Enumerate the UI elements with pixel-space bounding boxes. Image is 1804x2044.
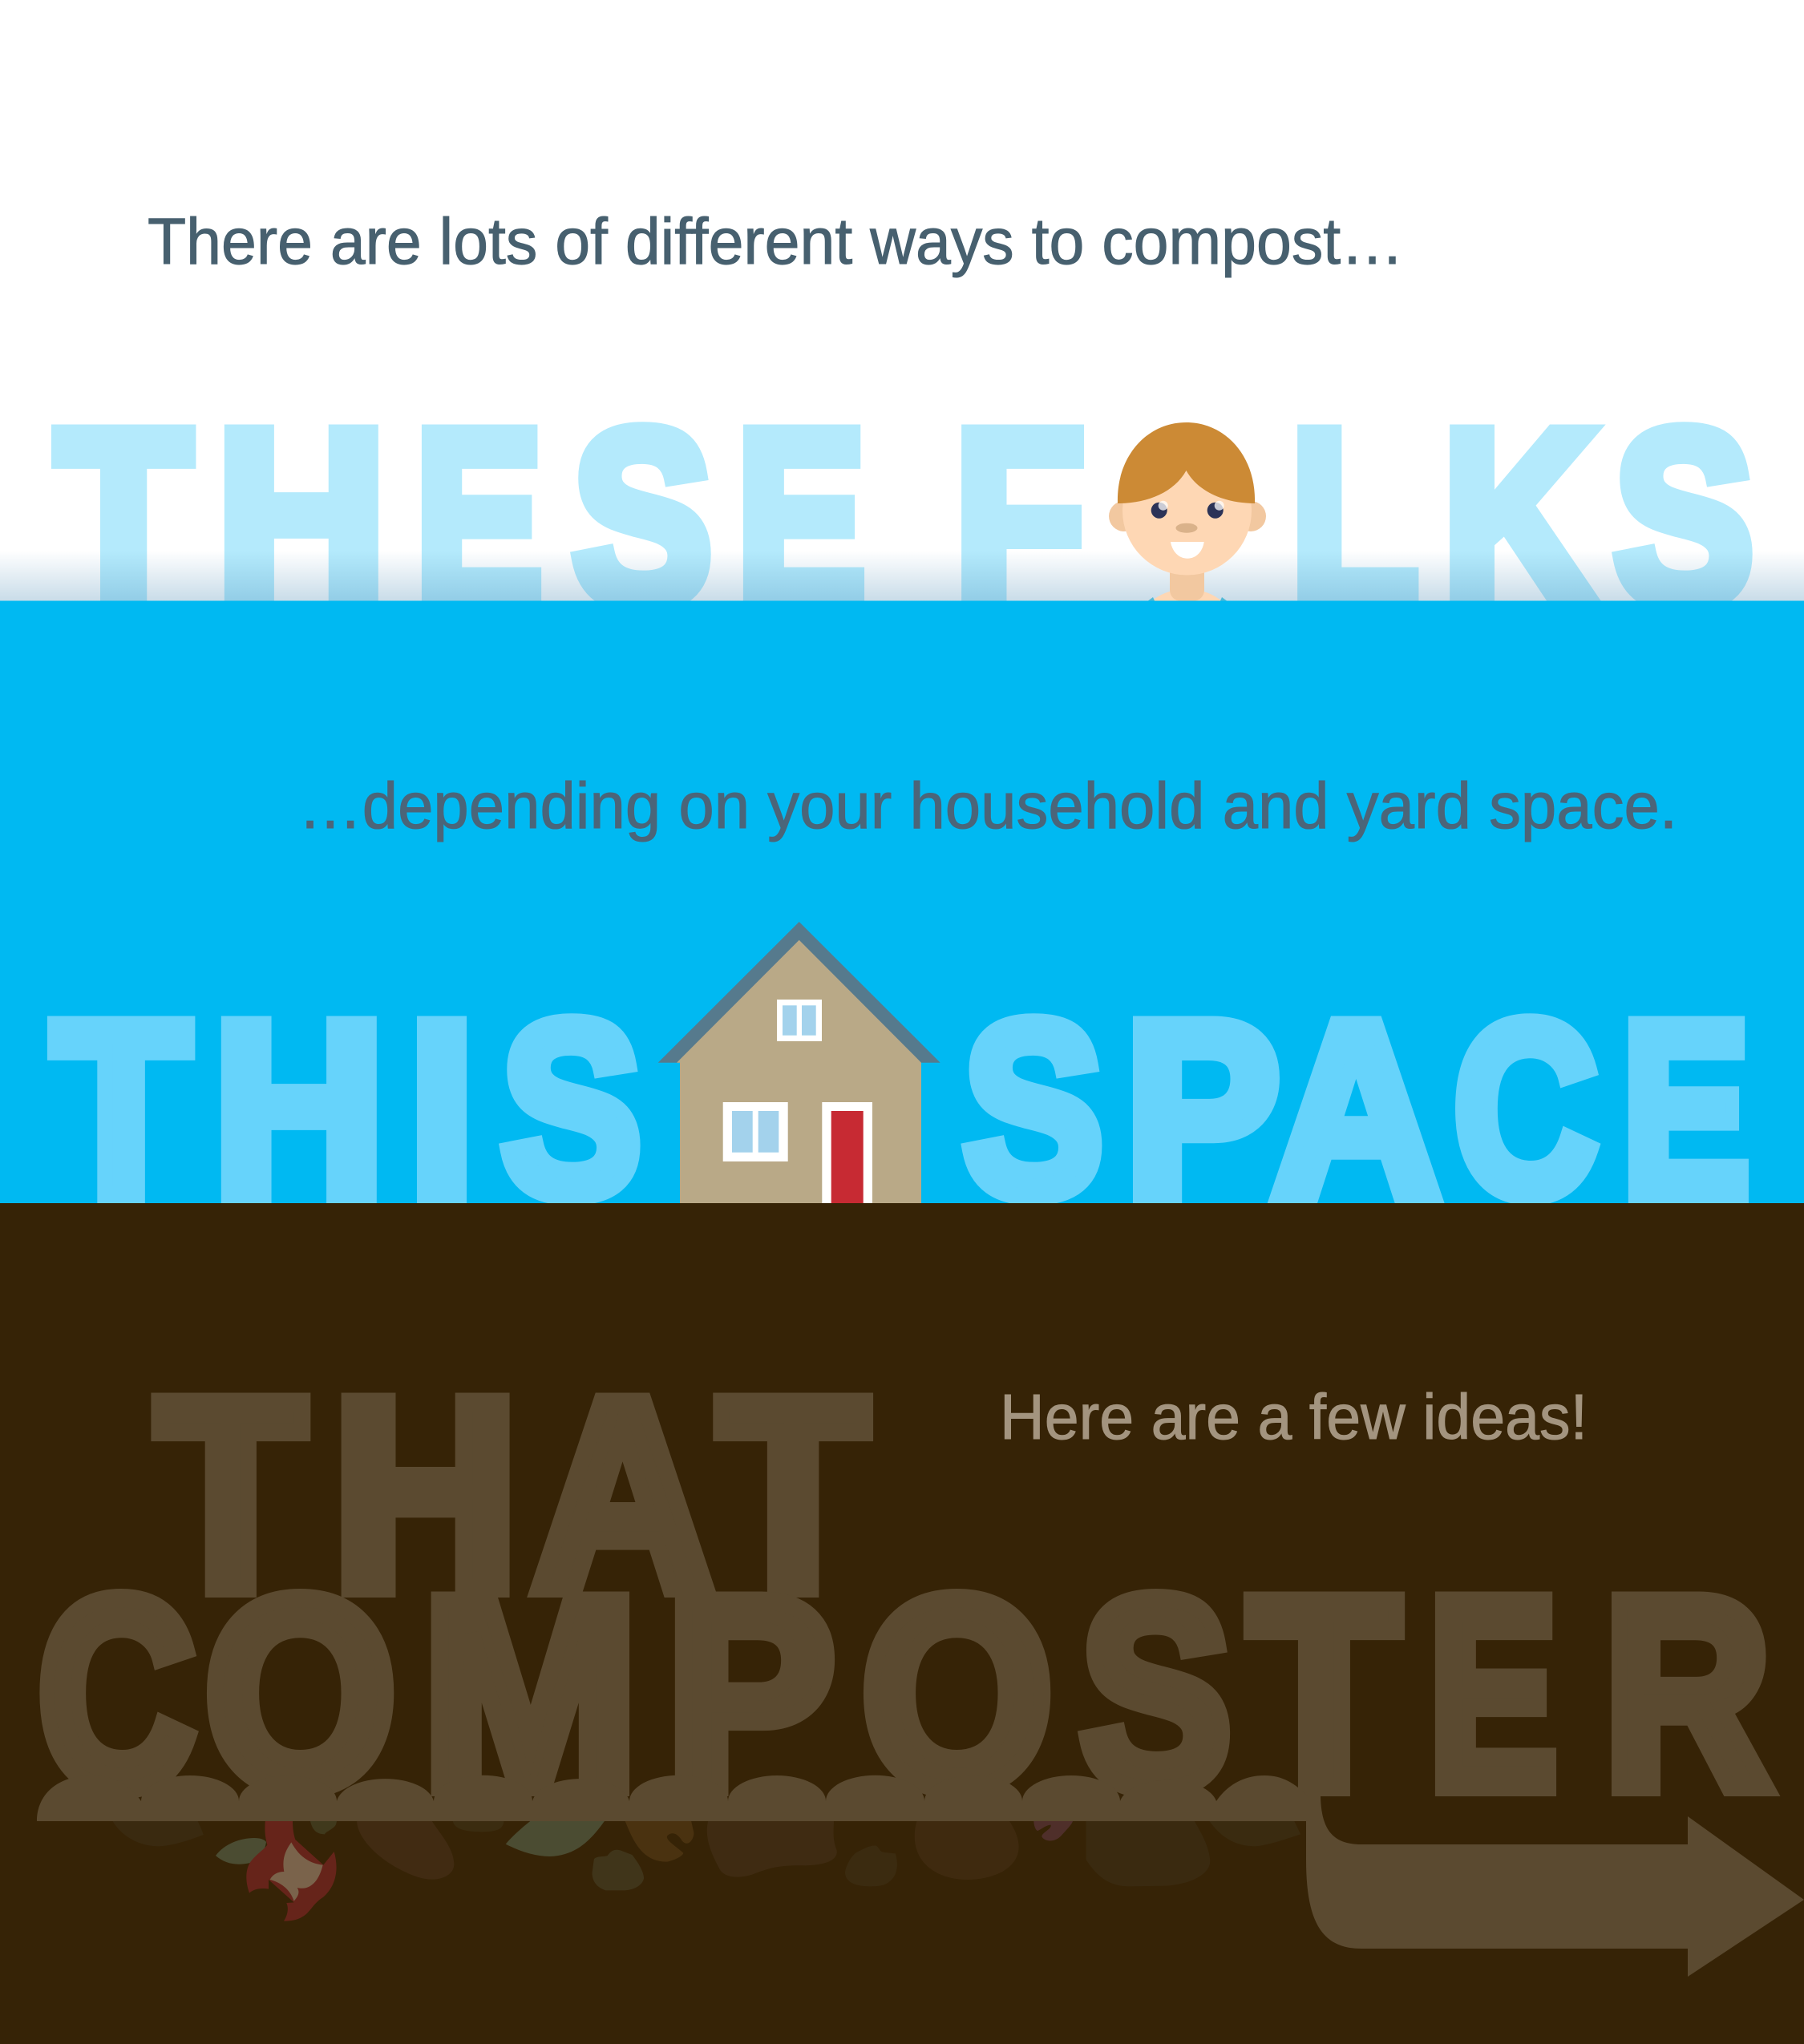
heading: THESE FOLKS: S [572, 379, 712, 656]
shoulders [1142, 589, 1232, 653]
callout text: Here are a few ideas! [1000, 1381, 1588, 1452]
ears [1109, 501, 1266, 531]
icon: house [658, 922, 940, 1203]
apple flesh [270, 1842, 323, 1901]
heading: THIS SPACE: A [1273, 972, 1439, 1248]
heading: THESE FOLKS: S [1614, 379, 1753, 656]
mouth [1171, 542, 1204, 559]
scraps right section [915, 1820, 1300, 1886]
heading: THESE FOLKS: T [56, 378, 191, 656]
apple core [246, 1820, 337, 1921]
heading: COMPOSTER: O [862, 1542, 1053, 1845]
heading: THIS SPACE: S [964, 971, 1103, 1247]
walls [677, 940, 921, 1203]
heading: THAT [156, 1343, 868, 1646]
heading: COMPOSTER: P [667, 1543, 835, 1845]
scraps left section [111, 1820, 897, 1890]
icon: smiling person replacing the letter O [1109, 422, 1266, 653]
heading: COMPOSTER: S [1080, 1541, 1232, 1844]
panel: sky blue band [0, 601, 1804, 1204]
small stem scrap [310, 1820, 337, 1833]
heading: THESE FOLKS: F [954, 380, 1085, 656]
heading: THESE FOLKS: E [737, 378, 865, 656]
heading: COMPOSTER: M [423, 1542, 638, 1844]
horizon haze gradient [0, 551, 1804, 601]
heading: THIS SPACE: P [1126, 971, 1280, 1248]
white sky background [0, 0, 1804, 601]
heading: THESE FOLKS: E [415, 380, 542, 656]
heading: THIS SPACE [52, 971, 1749, 1248]
heading: THIS SPACE: E [1622, 972, 1749, 1248]
heading: COMPOSTER [38, 1541, 1770, 1845]
heading: COMPOSTER: T [1249, 1543, 1399, 1845]
panel: soil band [0, 1203, 1804, 2044]
heading: THAT: T [718, 1344, 868, 1646]
heading: THIS SPACE: T [52, 971, 190, 1247]
heading: THESE FOLKS: L [1291, 378, 1418, 656]
face [1122, 446, 1252, 576]
heading: THAT: T [156, 1343, 305, 1646]
heading: COMPOSTER: R [1604, 1542, 1770, 1845]
heading: COMPOSTER: O [205, 1542, 396, 1845]
heading: COMPOSTER: C [38, 1542, 195, 1844]
roof [658, 922, 940, 1063]
eyes [1151, 501, 1224, 519]
compost scraps buried under the mound [111, 1820, 1300, 1921]
hair [1118, 422, 1255, 503]
apple skin [246, 1820, 337, 1921]
heading: THESE FOLKS: H [216, 379, 386, 656]
arrow pointing right [1306, 1796, 1804, 1977]
heading: THIS SPACE: I [409, 971, 475, 1247]
secondary text: …depending on your household and yard space. [298, 770, 1677, 842]
heading: THESE FOLKS: K [1443, 379, 1596, 656]
heading: THAT: H [333, 1343, 518, 1646]
attic window [777, 1000, 822, 1041]
heading: THIS SPACE: H [213, 972, 385, 1248]
nose [1175, 523, 1198, 533]
heading: COMPOSTER: E [1429, 1543, 1557, 1845]
heading: THIS SPACE: S [501, 971, 641, 1247]
heading: THIS SPACE: C [1454, 972, 1597, 1248]
neck [1170, 553, 1204, 601]
heading: THESE FOLKS [56, 378, 1753, 656]
door [822, 1102, 872, 1203]
heading: THAT: A [532, 1343, 713, 1646]
intro text: There are lots of different ways to compost… [148, 205, 1404, 278]
lower window [723, 1102, 788, 1161]
leaf [216, 1838, 266, 1864]
compost mound [37, 1775, 1307, 1821]
